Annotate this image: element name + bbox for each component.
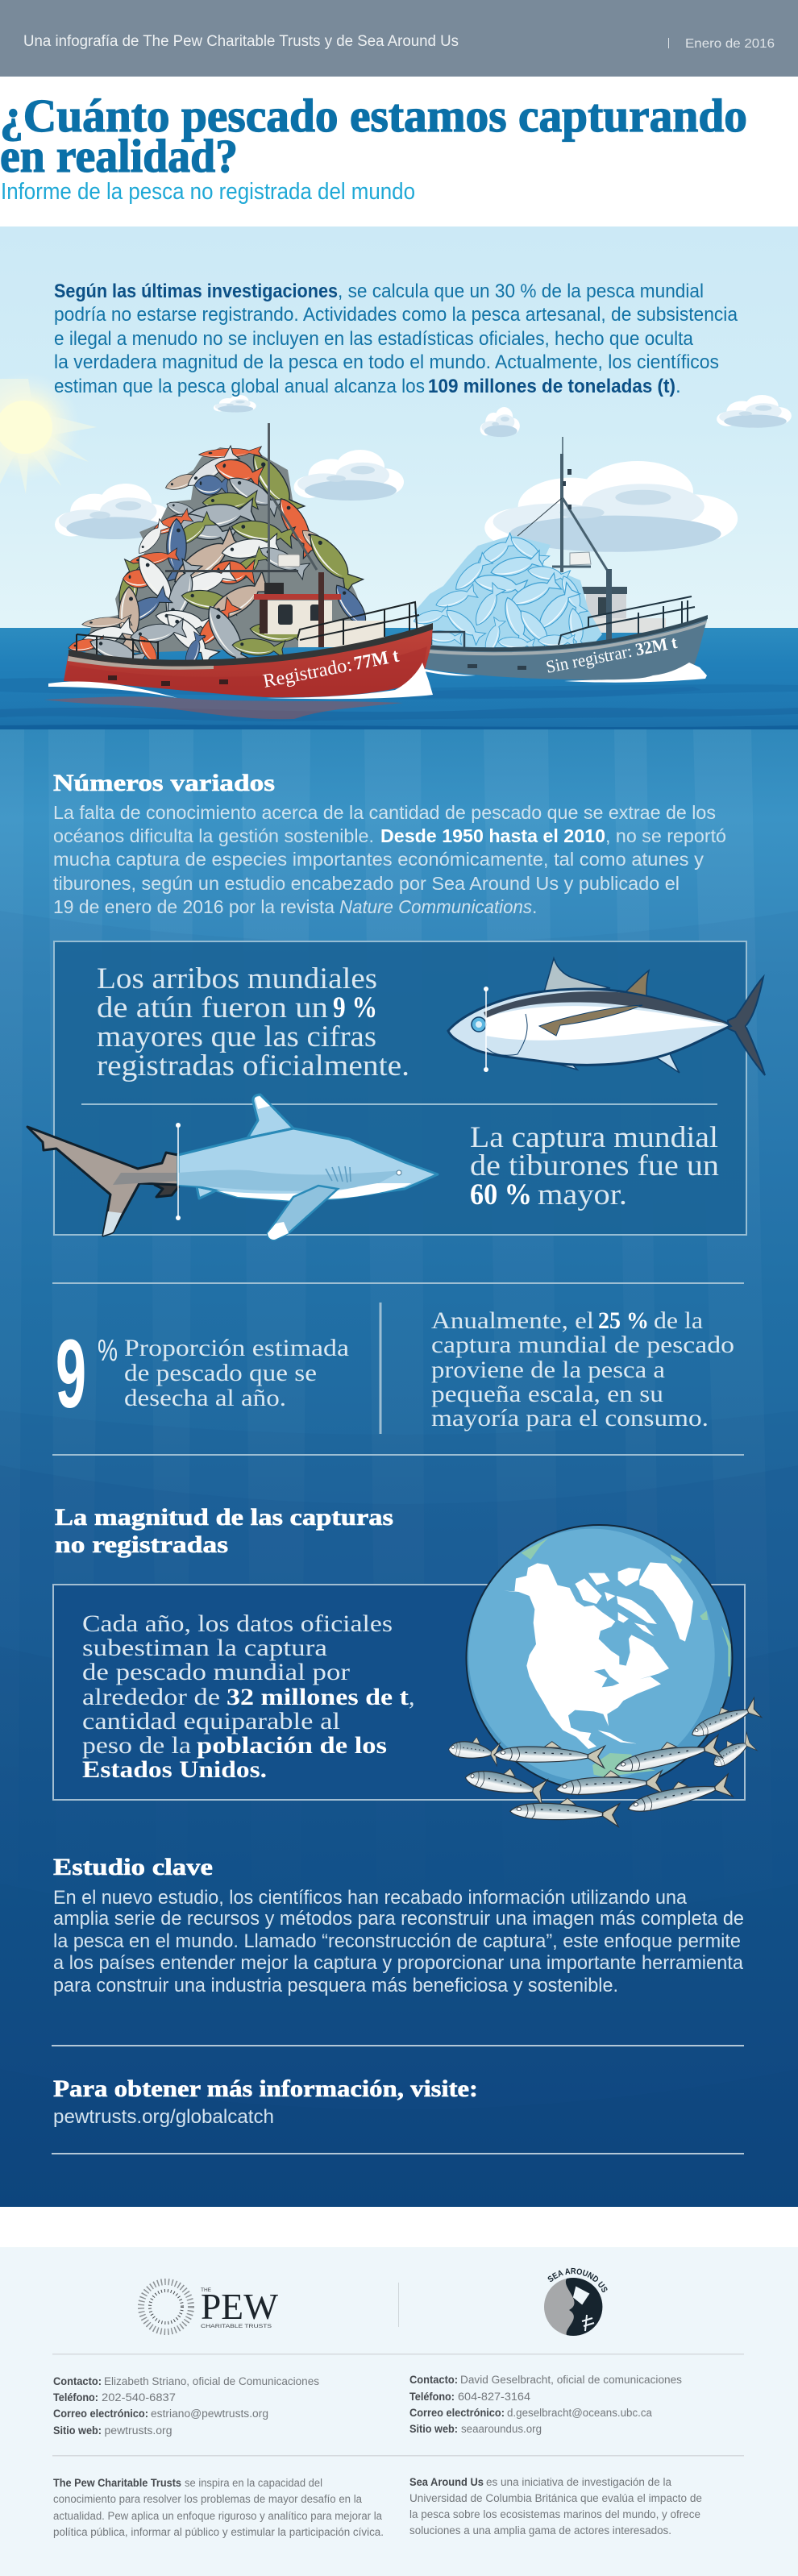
- bow foam: [564, 663, 707, 683]
- text block: numeros variados: Desde 1950 hasta el 2010: [380, 825, 605, 846]
- title: [0, 89, 747, 182]
- panel: sea surface: [0, 628, 798, 731]
- text: magnitude: subestiman la captura: [82, 1635, 327, 1661]
- text block: estudio clave: [53, 1887, 744, 1996]
- intro text: estiman que la pesca global anual alcanza los: [54, 376, 425, 397]
- about: pew: The Pew Charitable Trusts: [53, 2477, 181, 2489]
- logo: sea around us: SEA AROUND US: [548, 2268, 608, 2292]
- about: pew: conocimiento para resolver los problemas de mayor desafío en la: [53, 2493, 362, 2505]
- text block: numeros variados: tiburones, según un estudio encabezado por Sea Around Us y publicado el: [53, 873, 680, 894]
- shark body: [178, 1095, 438, 1201]
- logo: pew: THE: [201, 2288, 211, 2293]
- about: pew: política pública, informar al público y estimular la participación cívica.: [53, 2526, 384, 2538]
- clouds: [55, 395, 792, 552]
- land: greenland and arctic islands: [575, 1562, 693, 1743]
- stat: 9 percent: de pescado que se: [124, 1360, 317, 1386]
- stat: 9 percent: 9: [56, 1319, 86, 1428]
- contact: pew: 202-540-6837: [102, 2391, 176, 2404]
- text: tuna fact: de atún fueron un: [97, 991, 328, 1024]
- icon: tuna: [448, 958, 765, 1075]
- intro text: [54, 280, 738, 397]
- stat: 25 percent: pequeña escala, en su: [431, 1381, 663, 1407]
- stat: 9 percent: %: [98, 1334, 118, 1368]
- heading: numeros variados: Números variados: [53, 770, 275, 796]
- icon: globe: [466, 1525, 732, 1791]
- intro text: la verdadera magnitud de la pesca en todo el mundo. Actualmente, los científicos: [54, 351, 719, 373]
- contact: pew: estriano@pewtrusts.org: [151, 2408, 268, 2420]
- stat: 25 percent: [431, 1307, 734, 1431]
- text block: estudio clave: amplia serie de recursos y métodos para reconstruir una imagen más completa de: [53, 1908, 744, 1930]
- contact: pew: Contacto:: [53, 2375, 102, 2387]
- icon: red registered boat: [44, 423, 433, 719]
- contact: pew: Correo electrónico:: [53, 2408, 148, 2420]
- icon: sardine school: [447, 1696, 762, 1826]
- logo: pew: CHARITABLE TRUSTS: [201, 2324, 272, 2329]
- contact: pew: Elizabeth Striano, oficial de Comunicaciones: [104, 2375, 319, 2387]
- about: pew: [53, 2477, 384, 2538]
- contact: pew: Teléfono:: [53, 2391, 98, 2404]
- stat: 25 percent: de la: [654, 1307, 703, 1334]
- about: sea around us: soluciones a una amplia gama de actores interesados.: [409, 2524, 671, 2537]
- stat: 9 percent: desecha al año.: [124, 1385, 286, 1411]
- text block: numeros variados: .: [532, 896, 537, 917]
- about: sea around us: Universidad de Columbia Británica que evalúa el impacto de: [409, 2492, 702, 2504]
- text block: numeros variados: La falta de conocimiento acerca de la cantidad de pescado que se extrae de los: [53, 802, 716, 823]
- icon: sun: [0, 372, 97, 494]
- panel: sky: [0, 226, 798, 628]
- text: shark fact: [470, 1121, 719, 1211]
- title: en realidad?: [0, 130, 238, 182]
- text block: numeros variados: Nature Communications: [339, 896, 532, 917]
- hull: [64, 626, 433, 697]
- logo: pew: PEW: [201, 2287, 279, 2327]
- text block: estudio clave: a los países entender mejor la captura y proporcionar una importante herramienta: [53, 1952, 744, 1974]
- stat: 25 percent: 25 %: [598, 1307, 649, 1334]
- hull label: 32M t: [634, 632, 680, 659]
- text: tuna fact: 9 %: [333, 991, 377, 1024]
- text block: numeros variados: [53, 802, 726, 917]
- contact: sea around us: d.geselbracht@oceans.ubc.ca: [507, 2407, 652, 2419]
- hull: [421, 617, 708, 680]
- mast and rigging: [517, 437, 607, 572]
- about: sea around us: es una iniciativa de investigación de la: [486, 2476, 671, 2488]
- text: magnitude: población de los: [197, 1732, 387, 1759]
- divider block: more information: [52, 2045, 744, 2154]
- header bar: [0, 0, 798, 77]
- about: sea around us: la pesca sobre los ecosistemas marinos del mundo, y ofrece: [409, 2508, 700, 2520]
- contact: sea around us: 604-827-3164: [458, 2391, 531, 2403]
- text: shark fact: de tiburones fue un: [470, 1149, 719, 1182]
- header bar: Una infografía de The Pew Charitable Trusts y de Sea Around Us: [23, 33, 459, 50]
- red reflection: [44, 696, 403, 719]
- fish pile: [68, 446, 378, 674]
- intro text: podría no estarse registrando. Actividades como la pesca artesanal, de subsistencia: [54, 304, 738, 326]
- great lakes: [594, 1669, 619, 1687]
- text block: estudio clave: la pesca en el mundo. Llamado “reconstrucción de captura”, este enfoque permite: [53, 1930, 741, 1952]
- panel: magnitude box: [53, 1585, 745, 1800]
- hull label: 77M t: [352, 646, 401, 675]
- stat: 25 percent: mayoría para el consumo.: [431, 1405, 709, 1431]
- about: pew: actualidad. Pew aplica un enfoque riguroso y analítico para mejorar la: [53, 2510, 382, 2522]
- text: magnitude: de pescado mundial por: [82, 1659, 350, 1685]
- contact: sea around us: Sitio web:: [409, 2423, 458, 2435]
- text block: numeros variados: 19 de enero de 2016 por la revista: [53, 896, 335, 917]
- title: ¿Cuánto pescado estamos capturando: [0, 89, 747, 142]
- radar: [570, 552, 591, 565]
- panel: statistics: [52, 1282, 744, 1456]
- text: tuna fact: registradas oficialmente.: [97, 1049, 409, 1082]
- text: magnitude: Estados Unidos.: [82, 1756, 267, 1783]
- intro text: .: [675, 376, 681, 397]
- heading: estudio clave: Estudio clave: [53, 1854, 213, 1880]
- stat: 25 percent: captura mundial de pescado: [431, 1332, 734, 1358]
- hull label: Sin registrar:: [544, 641, 634, 677]
- panel: footer: [0, 2247, 798, 2576]
- contact: sea around us: Correo electrónico:: [409, 2407, 505, 2419]
- text block: numeros variados: mucha captura de especies importantes económicamente, tal como atunes y: [53, 849, 704, 870]
- wheelhouse: [254, 572, 384, 647]
- text: magnitude: alrededor de: [82, 1684, 220, 1710]
- contact: sea around us: seaaroundus.org: [461, 2423, 542, 2435]
- divider: logos: [398, 2283, 399, 2327]
- stat: 9 percent: [56, 1319, 349, 1428]
- text block: estudio clave: En el nuevo estudio, los científicos han recabado información utilizando una: [53, 1887, 688, 1909]
- text: magnitude: 32 millones de t: [227, 1684, 409, 1710]
- text: magnitude: [82, 1610, 414, 1783]
- text: magnitude: peso de la: [82, 1732, 191, 1759]
- contact: sea around us: David Geselbracht, oficial de comunicaciones: [460, 2374, 682, 2386]
- mast and crossbar: [165, 423, 317, 584]
- intro text: Según las últimas investigaciones: [54, 280, 338, 302]
- text: tuna fact: [97, 962, 409, 1082]
- land: north america: [504, 1563, 669, 1749]
- intro text: 109 millones de toneladas (t): [428, 376, 675, 397]
- about: sea around us: [409, 2476, 702, 2537]
- text: magnitude: cantidad equiparable al: [82, 1708, 340, 1735]
- shark tail section: [27, 1127, 178, 1236]
- stat: 25 percent: proviene de la pesca a: [431, 1357, 665, 1383]
- hull label: [261, 646, 401, 692]
- text block: numeros variados: océanos dificulta la gestión sostenible.: [53, 825, 374, 846]
- contact: pew: Sitio web:: [53, 2424, 102, 2437]
- contact: pew: [53, 2375, 319, 2437]
- bow foam: [266, 663, 433, 699]
- text: shark fact: mayor.: [538, 1178, 627, 1211]
- hull label: Registrado:: [261, 654, 354, 692]
- heading: more information: Para obtener más información, visite:: [53, 2075, 478, 2102]
- cabin: [579, 587, 666, 633]
- text block: estudio clave: para construir una industria pesquera más beneficiosa y sostenible.: [53, 1975, 618, 1996]
- text: magnitude: ,: [409, 1684, 414, 1710]
- about: pew: se inspira en la capacidad del: [185, 2477, 322, 2489]
- header bar: Enero de 2016: [685, 37, 775, 51]
- footer dividers: [52, 2354, 744, 2457]
- panel: underwater background: [0, 729, 798, 2207]
- text: shark fact: 60 %: [470, 1178, 532, 1211]
- intro text: e ilegal a menudo no se incluyen en las estadísticas oficiales, hecho que oculta: [54, 328, 693, 350]
- contact: sea around us: Contacto:: [409, 2374, 458, 2386]
- rail: [431, 569, 609, 647]
- icon: blue unregistered boat: [412, 437, 708, 683]
- heading: magnitud: no registradas: [55, 1531, 228, 1558]
- land: green areas: [522, 1538, 731, 1777]
- railings: [77, 602, 419, 661]
- text block: numeros variados: , no se reportó: [605, 825, 726, 846]
- icon: shark: [27, 1095, 438, 1240]
- subtitle: Informe de la pesca no registrada del mundo: [1, 179, 415, 205]
- contact: pew: pewtrusts.org: [105, 2424, 172, 2437]
- heading: magnitud: La magnitud de las capturas: [55, 1504, 393, 1531]
- contact: sea around us: [409, 2374, 682, 2435]
- ghost fish pile: [412, 532, 602, 656]
- text: tuna fact: Los arribos mundiales: [97, 962, 377, 995]
- panel: tuna and shark box: [54, 941, 746, 1235]
- text: magnitude: Cada año, los datos oficiales: [82, 1610, 393, 1637]
- text: shark fact: La captura mundial: [470, 1121, 718, 1154]
- logo: pew: [141, 2282, 279, 2332]
- stat: 25 percent: Anualmente, el: [431, 1307, 594, 1334]
- heading: magnitud: [55, 1504, 393, 1558]
- stat: 9 percent: Proporción estimada: [124, 1335, 349, 1361]
- intro text: , se calcula que un 30 % de la pesca mundial: [338, 280, 704, 302]
- hull label: [544, 632, 680, 677]
- logo: sea around us: [544, 2268, 608, 2336]
- text: tuna fact: mayores que las cifras: [97, 1020, 376, 1053]
- about: sea around us: Sea Around Us: [409, 2476, 484, 2488]
- link: pewtrusts.org/globalcatch: [53, 2106, 274, 2128]
- contact: sea around us: Teléfono:: [409, 2391, 455, 2403]
